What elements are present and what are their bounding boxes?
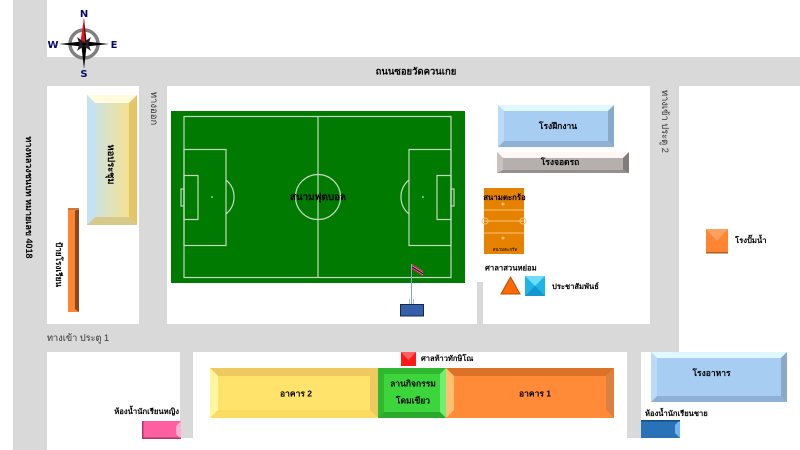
label: public relations: ประชาสัมพันธ์: [552, 282, 599, 291]
road label: gate 2: ทางเข้า ประตู 2: [659, 90, 670, 153]
takraw court: [482, 188, 526, 254]
pump house: โรงปั๊มน้ำ: [734, 234, 767, 245]
building 1: [446, 368, 614, 418]
takraw court: สนามตะกร้อ: [493, 247, 518, 252]
building: garage: [497, 152, 629, 173]
girls restroom: [114, 405, 181, 439]
building: workshop: โรงฝึกงาน: [538, 121, 577, 131]
building: assembly hall: [87, 95, 137, 225]
school sign: ป้ายโรงเรียน: [54, 242, 64, 287]
road label: gate 1: ทางเข้า ประตู 1: [47, 333, 109, 344]
canteen: โรงอาหาร: [691, 368, 731, 378]
icon: public relations square: [525, 276, 545, 296]
icon: pavilion triangle: [501, 277, 520, 294]
pump house: [706, 229, 767, 254]
takraw court: สนามตะกร้อ: [483, 192, 526, 202]
boys restroom: [641, 407, 708, 438]
compass: [47, 9, 118, 80]
road label: exit: ทางออก: [148, 92, 159, 125]
field label: สนามฟุตบอล: [290, 191, 346, 203]
shrine: ศาลท้าวทักษิโณ: [421, 353, 473, 363]
label: garden pavilion: ศาลาสวนหย่อม: [485, 264, 537, 272]
road label: highway: ทางหลวงชนบท หมายเลข 4018: [24, 136, 34, 259]
building 1: อาคาร 1: [519, 388, 551, 398]
compass: S: [80, 69, 88, 80]
compass: W: [47, 40, 59, 51]
compass: N: [80, 9, 88, 20]
activity courtyard: ลานกิจกรรม: [390, 378, 436, 388]
shrine: [401, 352, 473, 366]
activity courtyard: โดมเขียว: [395, 396, 430, 406]
compass: E: [111, 40, 118, 51]
building 2: [210, 368, 378, 418]
building: garage: โรงจอดรถ: [540, 157, 579, 167]
boys restroom: ห้องน้ำนักเรียนชาย: [645, 407, 708, 418]
girls restroom: ห้องน้ำนักเรียนหญิง: [114, 405, 179, 416]
road label: top road: ถนนซอยวัดควนเกย: [376, 66, 456, 78]
building 2: อาคาร 2: [280, 388, 312, 398]
school sign: [54, 208, 79, 312]
football field: [171, 111, 465, 283]
activity courtyard: [378, 368, 446, 418]
building: workshop: [498, 105, 614, 147]
flagpole: [400, 264, 424, 316]
building: assembly hall: หอประชุม: [105, 144, 117, 185]
canteen: [651, 352, 787, 402]
